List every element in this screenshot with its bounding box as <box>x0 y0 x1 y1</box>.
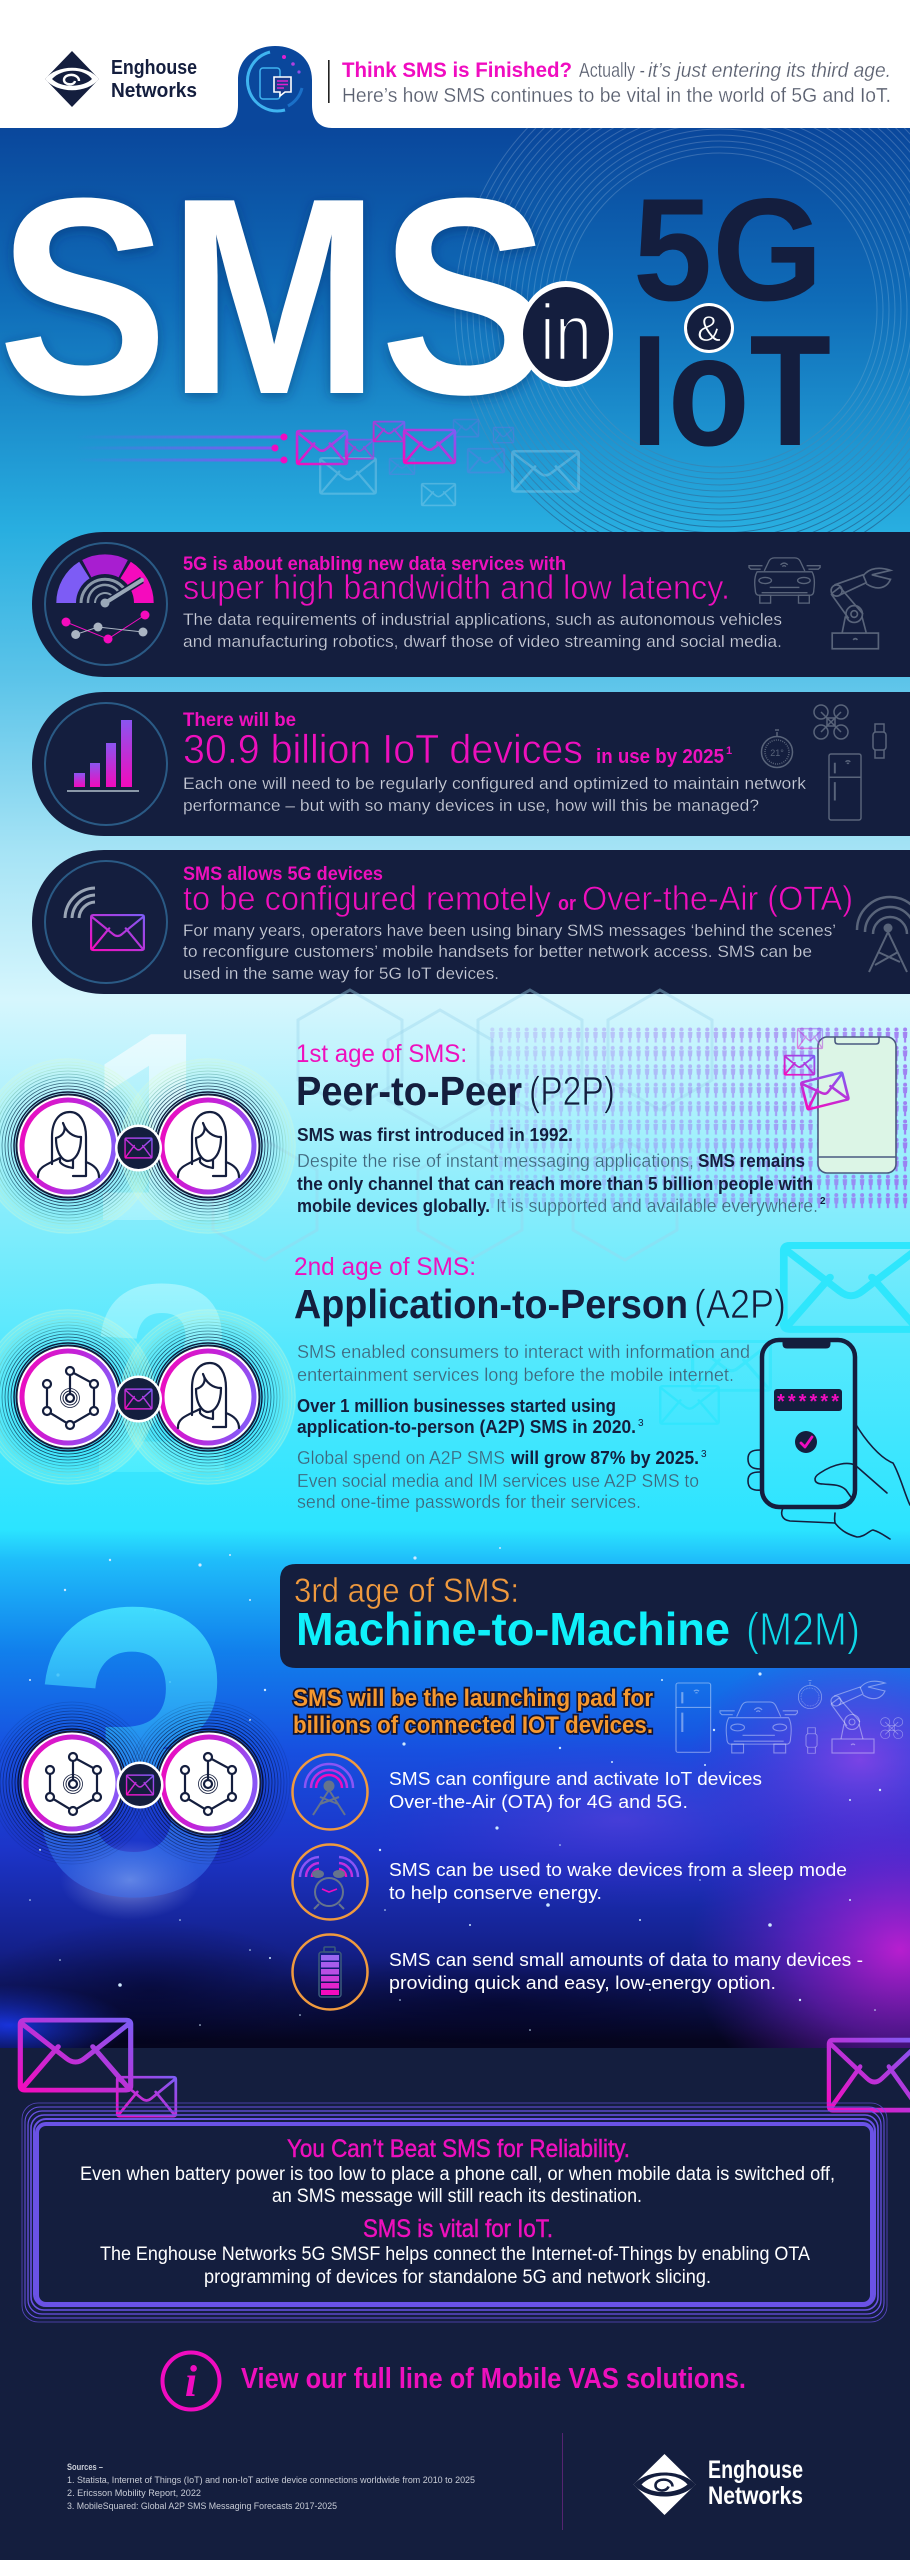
section: 1st age text: mobile devices globally. <box>297 1196 490 1216</box>
item: over-the-air: Over-the-Air (OTA) for 4G and 5G. <box>389 1792 688 1812</box>
section: 1st age text: Peer-to-Peer <box>296 1068 522 1114</box>
title: ampersand badge <box>684 303 734 353</box>
call to action: View our full line of Mobile VAS solutions. <box>241 2363 746 2395</box>
icon: hand holding phone <box>748 1340 910 1539</box>
panel text: 30.9 billion IoT devices <box>183 726 583 772</box>
icon: IoT devices: 21° <box>770 748 784 758</box>
section: 1st age text <box>296 1040 826 1216</box>
icon: IoT devices <box>762 705 886 820</box>
logo: footer <box>634 2454 803 2515</box>
icon: cell tower <box>857 897 910 972</box>
section: 1st age text: It is supported and available everywhere. <box>496 1196 818 1216</box>
panel text: to be configured remotely <box>183 880 551 918</box>
panel text: SMS allows 5G devices <box>183 863 383 885</box>
background: concentric rings behind title <box>455 45 910 575</box>
section: 3rd age heading box <box>280 1564 910 1668</box>
item: over-the-air <box>292 1754 762 1830</box>
sources <box>67 2462 475 2512</box>
background: hexagon pattern <box>213 990 712 1260</box>
panel text: Over-the-Air (OTA) <box>582 880 853 918</box>
header text: Actually - <box>579 60 645 82</box>
panel: reliability box: an SMS message will still reach its destination. <box>272 2186 642 2207</box>
panel text: to reconfigure customers’ mobile handsets for better network access. SMS can be <box>183 943 812 961</box>
logo: Enghouse Networks <box>45 51 197 107</box>
section: 2nd age text: 3 <box>701 1449 707 1460</box>
background: tab colour behind header <box>215 40 335 130</box>
section: 2nd age text <box>294 1253 786 1512</box>
section: 1st age text: 2 <box>820 1196 826 1207</box>
panel text: The data requirements of industrial applications, such as autonomous vehicles <box>183 611 782 629</box>
callout: launching pad: billions of connected IOT devices. <box>293 1712 653 1739</box>
section: 2nd age text: 3 <box>638 1418 644 1429</box>
panel text: super high bandwidth and low latency. <box>183 569 730 607</box>
panel: reliability box: The Enghouse Networks 5G SMSF helps connect the Internet-of-Things by enabling OTA <box>100 2244 810 2265</box>
panel text: and manufacturing robotics, dwarf those of video streaming and social media. <box>183 633 782 651</box>
icon: envelope with signal <box>65 888 144 950</box>
section: 1st age text: 1st age of SMS: <box>296 1040 467 1068</box>
background: stars <box>29 1547 881 2031</box>
section: 1st age icons <box>0 1058 296 1234</box>
section: 2nd age text: 2nd age of SMS: <box>294 1253 476 1281</box>
header text: Here’s how SMS continues to be vital in the world of 5G and IoT. <box>342 85 891 107</box>
title: ampersand badge: & <box>697 308 721 349</box>
item: low-energy data <box>292 1934 863 2010</box>
panel: reliability box: programming of devices for standalone 5G and network slicing. <box>204 2267 711 2288</box>
section: 1st age text: SMS was first introduced in 1992. <box>297 1125 573 1145</box>
panel text: performance – but with so many devices in use, how will this be managed? <box>183 797 759 815</box>
callout: launching pad: SMS will be the launching pad for <box>293 1685 653 1712</box>
icon: hand holding phone: ****** <box>777 1391 839 1413</box>
panel: reliability box <box>22 2103 887 2322</box>
icon: speed gauge <box>56 554 154 644</box>
background: cyan envelopes <box>660 1246 910 1424</box>
panel text: in use by 2025 <box>596 746 724 768</box>
header text: it’s just entering its third age. <box>648 60 891 82</box>
section: 2nd age text: application-to-person (A2P) SMS in 2020. <box>297 1417 636 1437</box>
section: 1st age text: Despite the rise of instant messaging applications, <box>297 1151 694 1171</box>
section: 3rd age heading box: (M2M) <box>746 1603 860 1655</box>
icon: phone with envelopes <box>785 1029 896 1173</box>
panel text: used in the same way for 5G IoT devices. <box>183 965 499 983</box>
page background <box>0 128 910 2058</box>
panel text: 5G is about enabling new data services with <box>183 553 566 575</box>
panel: reliability box: Even when battery power is too low to place a phone call, or when mobile data is switched off, <box>80 2164 835 2185</box>
sources: 2. Ericsson Mobility Report, 2022 <box>67 2488 201 2499</box>
bottom section background <box>0 2048 910 2560</box>
divider <box>562 2433 563 2530</box>
sources: 1. Statista, Internet of Things (IoT) and non-IoT active device connections worldwide from 2010 to 2025 <box>67 2475 475 2486</box>
title: IoT: IoT <box>631 303 831 479</box>
icon: flying envelopes <box>75 420 579 505</box>
panel text: There will be <box>183 709 296 731</box>
section: 2nd age text: Global spend on A2P SMS <box>297 1448 505 1468</box>
section: 2nd age text: will grow 87% by 2025. <box>510 1448 699 1468</box>
section: 2nd age text: SMS enabled consumers to interact with information and <box>297 1342 750 1362</box>
panel text <box>183 553 782 651</box>
section: 2nd age text: entertainment services long before the mobile internet. <box>297 1365 734 1385</box>
header text: Think SMS is Finished? <box>342 59 572 82</box>
icon: growth bars <box>67 720 139 792</box>
icon: car and robot arm <box>749 558 890 649</box>
panel: 30.9 billion IoT devices <box>32 692 910 836</box>
panel: reliability box: You Can’t Beat SMS for Reliability. <box>287 2135 630 2163</box>
sources: 3. MobileSquared: Global A2P SMS Messaging Forecasts 2017-2025 <box>67 2501 337 2512</box>
background: crowd of people <box>488 1027 910 1211</box>
item: low-energy data: SMS can send small amounts of data to many devices - <box>389 1950 863 1970</box>
numeral 2: 2 <box>90 1229 235 1530</box>
icon: phone and chat in tab <box>248 52 302 111</box>
background: space nebula <box>0 1640 910 2120</box>
title: in badge: in <box>540 288 592 377</box>
panel: reliability box: SMS is vital for IoT. <box>363 2215 553 2243</box>
logo: footer: Enghouse <box>708 2456 803 2484</box>
panel: configured over-the-air <box>32 850 910 994</box>
section: 1st age text: (P2P) <box>529 1068 615 1114</box>
section: 1st age text: SMS remains <box>698 1151 805 1171</box>
section: 3rd age icons <box>0 1702 290 1864</box>
call to action <box>162 2352 746 2410</box>
logo: Enghouse Networks: Networks <box>111 80 197 102</box>
item: low-energy data: providing quick and easy, low-energy option. <box>389 1973 776 1993</box>
title: in badge <box>519 281 613 387</box>
section: 3rd age heading box: Machine-to-Machine <box>296 1603 730 1655</box>
icon: IoT devices row <box>676 1680 903 1753</box>
section: 2nd age text: Over 1 million businesses started using <box>297 1396 616 1416</box>
icon: large envelopes <box>20 2020 910 2116</box>
numeral 1: 1 <box>86 977 236 1278</box>
section: 2nd age icons <box>0 1309 296 1485</box>
panel text <box>183 863 853 983</box>
item: wake from sleep <box>292 1844 847 1920</box>
logo: Enghouse Networks: Enghouse <box>111 57 197 79</box>
section: 2nd age text: (A2P) <box>694 1281 786 1327</box>
item: wake from sleep: SMS can be used to wake devices from a sleep mode <box>389 1860 847 1880</box>
section: 2nd age text: Even social media and IM services use A2P SMS to <box>297 1471 699 1491</box>
callout: launching pad <box>293 1685 653 1739</box>
panel text: For many years, operators have been using binary SMS messages ‘behind the scenes’ <box>183 922 836 940</box>
sources: Sources – <box>67 2462 103 2473</box>
item: wake from sleep: to help conserve energy. <box>389 1883 602 1903</box>
call to action: i <box>185 2357 198 2406</box>
title: 5G: 5G <box>633 168 823 331</box>
section: 2nd age text: send one-time passwords for their services. <box>297 1492 641 1512</box>
section: 2nd age text: Application-to-Person <box>294 1281 688 1327</box>
header band <box>0 0 910 128</box>
panel: 5G bandwidth <box>32 532 910 677</box>
logo: footer: Networks <box>708 2482 803 2510</box>
title: SMS: SMS <box>0 141 550 453</box>
panel text <box>183 709 807 815</box>
header text <box>342 59 891 107</box>
section: 1st age text: the only channel that can reach more than 5 billion people with <box>297 1174 813 1194</box>
divider <box>328 60 330 103</box>
numeral 3: 3 <box>32 1522 237 1980</box>
panel text: Each one will need to be regularly configured and optimized to maintain network <box>183 775 807 793</box>
panel text: 1 <box>726 745 732 757</box>
section: 3rd age heading box: 3rd age of SMS: <box>294 1572 519 1610</box>
panel text: or <box>558 893 576 915</box>
item: over-the-air: SMS can configure and activate IoT devices <box>389 1769 762 1789</box>
